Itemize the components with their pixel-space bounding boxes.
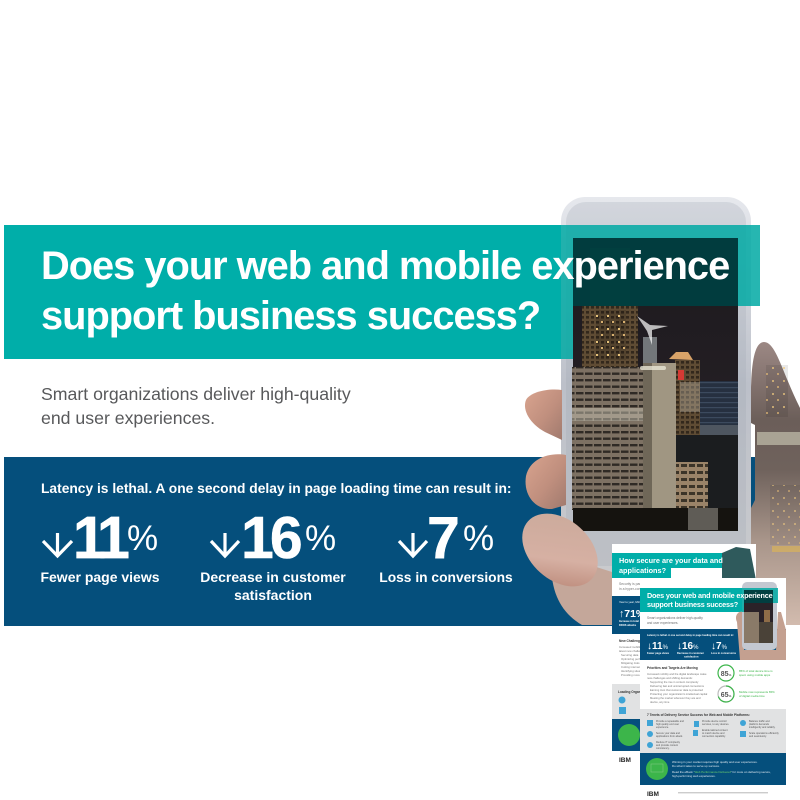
front document blue footer bbox=[640, 753, 786, 785]
lower finger and palm bbox=[552, 565, 612, 625]
back document challenges list: Securing data bbox=[621, 653, 639, 657]
front document tenets panel bbox=[640, 709, 786, 753]
front document tenets panel: Balance traffic and bbox=[749, 720, 770, 723]
statistic: 7 percent: 7 bbox=[427, 505, 460, 571]
blue statistics band bbox=[4, 457, 755, 626]
small white tower bbox=[643, 337, 657, 363]
front document tenets panel: and provide content bbox=[656, 744, 678, 747]
ring finger bbox=[508, 499, 612, 601]
front document priorities list: Meeting the market wherever they are and bbox=[650, 696, 701, 700]
back document challenges list bbox=[619, 639, 646, 677]
front document intro: and user experiences. bbox=[647, 621, 678, 625]
85 percent gauge bbox=[718, 665, 773, 681]
front document tenets panel: high quality end user bbox=[656, 723, 679, 726]
foreground dark bbox=[676, 435, 738, 531]
icon: down arrow bbox=[43, 533, 72, 556]
back document blue footer bbox=[612, 719, 756, 751]
front document header overlay bbox=[742, 588, 778, 612]
front document blue stats bbox=[647, 633, 737, 658]
front document priorities list: Protecting your organization's intellectual capital bbox=[650, 692, 708, 696]
65 percent gauge bbox=[718, 686, 775, 702]
front document mini phone bbox=[736, 582, 786, 660]
front document intro: Smart organizations deliver high-quality bbox=[647, 616, 703, 620]
back document challenges list: latest new challenges bbox=[619, 649, 646, 653]
subheading bbox=[41, 384, 351, 428]
front document thumbnail bbox=[640, 578, 786, 800]
statistic: 7 percent bbox=[379, 505, 513, 585]
front document IBM logo: IBM bbox=[647, 791, 659, 798]
front document tenets panel: services, to any devices. bbox=[702, 723, 730, 726]
front document tenets panel: Provide device control bbox=[702, 720, 727, 723]
back document header bbox=[612, 553, 722, 578]
back document intro: in a hyper-connected bbox=[619, 587, 651, 591]
back document challenges list: Providing more bbox=[621, 673, 640, 677]
front document title: Does your web and mobile experience bbox=[647, 591, 773, 600]
85 percent gauge: spent using mobile apps bbox=[739, 673, 771, 677]
star light bbox=[637, 316, 668, 345]
front document tenets panel: Reduce IT complexity bbox=[656, 741, 681, 744]
distant building bbox=[696, 381, 738, 425]
back document challenges list: Increased mobility bbox=[619, 645, 642, 649]
subheading: end user experiences. bbox=[41, 408, 215, 428]
back document gray section bbox=[612, 684, 756, 719]
statistic: 11 percent: Fewer page views bbox=[40, 569, 160, 585]
statistic: 16 percent: Decrease in customer bbox=[200, 569, 346, 585]
phone screen city photo bbox=[572, 238, 738, 531]
front document blue stats: Fewer page views bbox=[647, 651, 670, 655]
front document tenets panel: Enable tailored content bbox=[702, 729, 728, 732]
front document tenets panel: connection capability. bbox=[702, 735, 726, 738]
front document priorities list: new challenges and shifting demands: bbox=[647, 676, 693, 680]
front document tenets panel: 7 Tenets of Delivery Service Success for Web and Mobile Platforms: bbox=[647, 713, 750, 717]
front document title: support business success? bbox=[647, 600, 739, 609]
light tower bbox=[643, 363, 676, 518]
statistic: 7 percent: % bbox=[463, 519, 494, 558]
front document title bbox=[647, 591, 773, 609]
front document tenets panel: Secure your data and bbox=[656, 732, 681, 735]
front document tenets panel: and seamlessly. bbox=[749, 735, 767, 738]
smartphone bbox=[561, 197, 751, 572]
front document tenets panel: consistency. bbox=[656, 747, 670, 750]
front document blue stats: Latency is lethal. A one second delay in page loading time can result in: bbox=[647, 633, 734, 637]
icon: down arrow bbox=[399, 533, 427, 556]
statistic: 7 percent: Loss in conversions bbox=[379, 570, 513, 585]
front document tenets panel: platform demands bbox=[749, 723, 770, 726]
back document blue stat: Year to year, Mirrors bbox=[619, 600, 645, 604]
back document challenges list: Optimizing perf bbox=[621, 657, 640, 661]
back document IBM logo: IBM bbox=[619, 757, 631, 764]
85 percent gauge: 85% of total device time is bbox=[739, 669, 773, 673]
65 percent gauge: Mobile now represents 65% bbox=[739, 690, 775, 694]
translucent teal overlay across phone bbox=[561, 225, 760, 359]
front document tenets panel: to match device and bbox=[702, 732, 725, 735]
back document blue stat: ↑71% bbox=[619, 608, 646, 620]
back document challenges list: Mitigating risks bbox=[621, 661, 640, 665]
teal title band bbox=[4, 225, 572, 359]
front document priorities list: Earning trust that customer data is protected bbox=[650, 688, 703, 692]
back document blue stat: Increase in total bbox=[619, 619, 639, 623]
back document blue stat: DDOS attacks bbox=[619, 623, 637, 627]
back document blue stat bbox=[612, 596, 756, 634]
front document blue stats: ↓7% bbox=[711, 641, 728, 652]
back document challenges list: Identifying sites bbox=[621, 669, 641, 673]
latency statement: Latency is lethal. A one second delay in page loading time can result in: bbox=[41, 481, 511, 496]
front document blue footer: Do what it takes to serve up success. bbox=[672, 764, 720, 768]
statistic: 11 percent: 11 bbox=[73, 505, 129, 571]
front document priorities list: device, any time bbox=[650, 700, 670, 704]
back document thumbnail bbox=[612, 544, 756, 770]
big building bbox=[572, 367, 643, 510]
back document title: applications? bbox=[619, 566, 667, 575]
title bbox=[41, 244, 729, 338]
back document gray section: Loading Organizations bbox=[618, 690, 653, 694]
thumb city overlay bbox=[766, 365, 788, 417]
front document blue stats: Loss in conversions bbox=[711, 651, 737, 655]
statistic: 16 percent: 16 bbox=[241, 505, 301, 571]
65 percent gauge: 65% bbox=[721, 692, 732, 699]
front document blue footer: Winning in your market requires high quality and user experiences. bbox=[672, 760, 758, 764]
back document building image bbox=[722, 547, 756, 580]
index finger bbox=[525, 389, 562, 440]
front document blue footer: high-performing web experiences. bbox=[672, 774, 716, 778]
thumb and palm behind phone bbox=[590, 342, 800, 625]
front document blue stats: ↓11% bbox=[647, 641, 669, 652]
back document intro: Security is paramount bbox=[619, 582, 652, 586]
85 percent gauge: 85% bbox=[721, 671, 732, 678]
front document tenets panel: Provide a repeatable and bbox=[656, 720, 685, 723]
front document intro bbox=[647, 616, 703, 625]
title: support business success? bbox=[41, 294, 540, 338]
65 percent gauge: of digital media time bbox=[739, 694, 765, 698]
front document priorities list: Priorities and Targets Are Moving bbox=[647, 666, 698, 670]
tall tower top bbox=[582, 238, 638, 368]
statistic: 16 percent: satisfaction bbox=[234, 587, 312, 603]
statistic: 11 percent bbox=[40, 505, 160, 585]
front document blue stats: Decrease in customer bbox=[677, 651, 704, 655]
front document tenets panel: intelligently and reliably. bbox=[749, 726, 776, 729]
middle finger bbox=[526, 454, 566, 509]
front document blue stats: satisfaction bbox=[684, 654, 699, 658]
icon: down arrow bbox=[211, 533, 239, 556]
front document priorities list bbox=[647, 666, 708, 704]
front document tenets panel: experience. bbox=[656, 726, 669, 729]
front document blue stats: ↓16% bbox=[677, 641, 699, 652]
statistic: 16 percent: % bbox=[305, 519, 336, 558]
title: Does your web and mobile experience bbox=[41, 244, 729, 288]
front document priorities list: Supporting the rise in content complexity bbox=[650, 680, 699, 684]
front document blue stats band bbox=[640, 629, 786, 660]
front document priorities list: Increased mobility and the digital landscape make bbox=[647, 672, 707, 676]
front document header bbox=[640, 588, 744, 612]
front document priorities list: Delivering fast and uninterrupted connections bbox=[650, 684, 705, 688]
front document legal line bbox=[678, 792, 768, 793]
back document title: How secure are your data and bbox=[619, 556, 723, 565]
statistic: 16 percent bbox=[200, 505, 346, 603]
fingers in front of phone bbox=[508, 389, 612, 625]
phone body bbox=[561, 197, 751, 572]
subheading: Smart organizations deliver high-quality bbox=[41, 384, 351, 404]
front document tenets panel: applications from attack. bbox=[656, 735, 683, 738]
front document tenets panel: Scale operations efficiently bbox=[749, 732, 779, 735]
back document intro bbox=[619, 582, 652, 591]
red tower bbox=[675, 360, 700, 435]
back document title bbox=[619, 556, 723, 575]
back document challenges list: New Challenges bbox=[619, 639, 644, 643]
front document blue footer: Read the eBook “Web Performance Delivered” for more on delivering secure, bbox=[672, 770, 771, 774]
statistic: 11 percent: % bbox=[127, 519, 158, 558]
back document challenges list: Cutting internet bbox=[621, 665, 640, 669]
